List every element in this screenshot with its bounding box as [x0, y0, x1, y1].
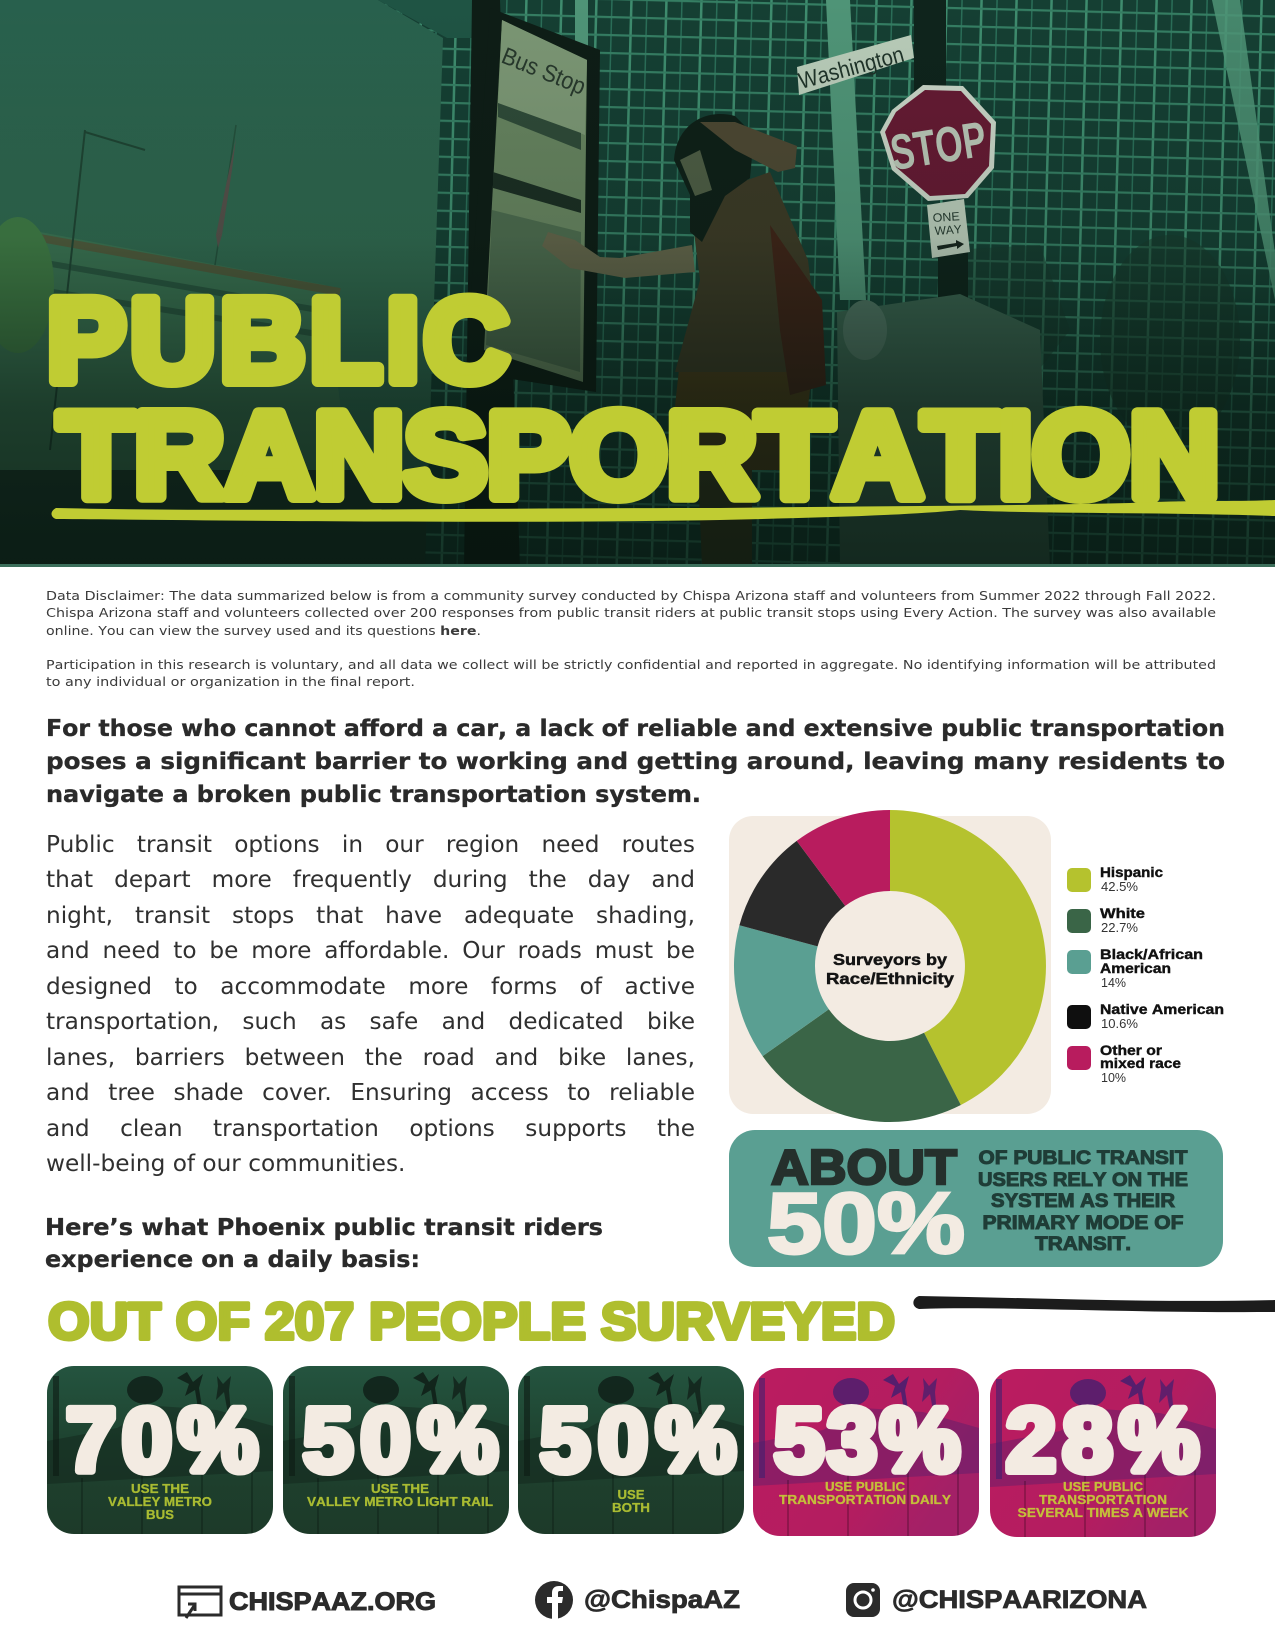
bold lead paragraph: For those who cannot afford a car, a lack of reliable and extensive public transportation — [46, 716, 1225, 742]
body paragraph: and tree shade cover. Ensuring access to reliable — [46, 1079, 695, 1106]
stat card: 28% use public transportation several times a week: USE PUBLIC — [1063, 1479, 1144, 1494]
donut wedge: Native American 10.6% — [739, 841, 845, 946]
data disclaimer text — [46, 588, 1216, 689]
icon: facebook — [535, 1581, 573, 1619]
legend swatch: Hispanic — [1067, 868, 1091, 892]
callout text: TRANSIT. — [1035, 1234, 1131, 1255]
stat card: 28% use public transportation several times a week: TRANSPORTATION — [1039, 1492, 1167, 1507]
icon: browser window — [179, 1587, 221, 1618]
photo detail: utility box — [837, 294, 1050, 567]
photo detail: one way sign: WAY — [934, 222, 962, 238]
footer: facebook — [535, 1581, 740, 1619]
legend labels: Native American — [1100, 1001, 1224, 1017]
legend labels: Other or — [1100, 1042, 1163, 1058]
stat card: 50% use both: USE — [618, 1487, 645, 1502]
donut wedge: Black/African American 14% — [734, 925, 829, 1056]
callout text: OF PUBLIC TRANSIT — [978, 1148, 1188, 1169]
stat card: 70% use the Valley Metro bus — [47, 1366, 273, 1534]
body paragraph: lanes, barriers between the road and bike lanes, — [46, 1044, 695, 1071]
dark gradient overlay — [0, 0, 1275, 565]
title: public transportation: PUBLIC — [47, 275, 509, 407]
footer: instagram: @CHISPAARIZONA — [892, 1586, 1147, 1614]
bold lead paragraph — [46, 716, 1225, 808]
data disclaimer text: online. You can view the survey used and its questions here . — [46, 623, 481, 638]
photo detail: Washington street sign: Washington — [796, 41, 907, 94]
legend labels: American — [1100, 960, 1171, 976]
stat card: 28% use public transportation several times a week: SEVERAL TIMES A WEEK — [1018, 1505, 1189, 1520]
hero photo: woman reading a bus stop sign — [0, 0, 1275, 567]
legend labels: 42.5% — [1101, 879, 1138, 894]
bold lead paragraph: poses a significant barrier to working and getting around, leaving many residents to — [46, 749, 1225, 775]
stat card: 50% use the Valley Metro light rail: 50% — [303, 1391, 498, 1491]
legend swatch: Black/African American — [1067, 950, 1091, 974]
footer: facebook: @ChispaAZ — [584, 1586, 740, 1614]
donut centre label — [826, 952, 954, 988]
donut wedge: Hispanic 42.5% — [890, 810, 1046, 1105]
body paragraph: transportation, such as safe and dedicated bike — [46, 1008, 695, 1035]
donut wedge: Other or mixed race 10% — [797, 810, 890, 906]
legend labels: 22.7% — [1101, 920, 1138, 935]
callout label: about: ABOUT — [771, 1141, 957, 1195]
callout text: USERS RELY ON THE — [978, 1170, 1188, 1191]
photo detail: distant building and tree — [0, 217, 460, 567]
body paragraph: that depart more frequently during the day and — [46, 866, 695, 893]
data disclaimer text: Chispa Arizona staff and volunteers collected over 200 responses from public transit riders at public transit stops using Every Action. The survey was also available — [46, 605, 1216, 620]
legend labels: mixed race — [1100, 1055, 1181, 1071]
photo detail: one way sign: ONE — [932, 209, 960, 225]
callout text — [978, 1148, 1188, 1255]
donut centre label: Race/Ethnicity — [826, 971, 954, 988]
photo detail: bus stop pole and information panel — [464, 0, 600, 567]
body paragraph: and need to be more affordable. Our roads must be — [46, 937, 695, 964]
callout: about 50% rely on transit — [729, 1130, 1223, 1272]
stat card: 70% use the Valley Metro bus: VALLEY METRO — [108, 1494, 212, 1509]
callout figure: 50%: 50% — [767, 1176, 965, 1272]
body paragraph: Public transit options in our region need routes — [46, 831, 695, 858]
donut centre label: Surveyors by — [833, 952, 947, 969]
stat card: 50% use the Valley Metro light rail: VALLEY METRO LIGHT RAIL — [307, 1494, 493, 1509]
legend labels: 10.6% — [1101, 1016, 1138, 1031]
photo detail: one way sign — [927, 199, 970, 258]
legend labels: 10% — [1101, 1070, 1126, 1085]
body paragraph: night, transit stops that have adequate shading, — [46, 902, 695, 929]
legend swatch: Other or mixed race — [1067, 1046, 1091, 1070]
stat card: 28% use public transportation several times a week: 28% — [1006, 1391, 1199, 1491]
stat card: 50% use the Valley Metro light rail: USE THE — [371, 1481, 429, 1496]
body paragraph — [46, 831, 695, 1177]
subheading: daily experience — [45, 1215, 603, 1273]
data disclaimer text: Data Disclaimer: The data summarized below is from a community survey conducted by Chispa Arizona staff and volunteers from Summer 2022 through Fall 2022. — [46, 588, 1216, 603]
body paragraph: and clean transportation options supports the — [46, 1114, 695, 1142]
stat card: 70% use the Valley Metro bus: 70% — [66, 1391, 258, 1491]
stat card: 53% use public transportation daily: USE PUBLIC — [825, 1479, 906, 1494]
legend labels: Black/African — [1100, 946, 1203, 962]
legend labels: Hispanic — [1100, 864, 1163, 880]
black brush stroke — [913, 1296, 1275, 1312]
subheading: daily experience: Here’s what Phoenix public transit riders — [45, 1215, 603, 1241]
stat card: 53% use public transportation daily: TRANSPORTATION DAILY — [779, 1492, 951, 1507]
body paragraph: well-being of our communities. — [46, 1150, 405, 1177]
chart legend — [1067, 864, 1224, 1085]
stat card: 28% use public transportation several times a week — [990, 1369, 1216, 1537]
body paragraph: designed to accommodate more forms of active — [46, 973, 695, 1000]
donut wedge: White 22.7% — [763, 1009, 961, 1122]
heading: out of 207 people surveyed: OUT OF 207 PEOPLE SURVEYED — [48, 1293, 895, 1351]
photo detail: woman figure — [542, 114, 826, 567]
title: public transportation — [47, 275, 1220, 524]
bold lead paragraph: navigate a broken public transportation system. — [46, 782, 701, 808]
photo detail: stop sign: STOP — [887, 111, 990, 181]
footer: instagram — [846, 1583, 1147, 1617]
legend swatch: Native American — [1067, 1005, 1091, 1029]
stat card: 50% use the Valley Metro light rail — [283, 1366, 509, 1534]
footer: website — [179, 1587, 436, 1618]
legend labels: 14% — [1101, 975, 1126, 990]
stat card: 70% use the Valley Metro bus: USE THE — [131, 1481, 189, 1496]
legend labels: White — [1100, 905, 1145, 921]
subheading: daily experience: experience on a daily basis: — [45, 1247, 420, 1273]
photo detail: stop sign — [880, 85, 996, 201]
callout text: PRIMARY MODE OF — [982, 1213, 1184, 1234]
photo detail: stop sign post — [914, 0, 946, 120]
footer: website: CHISPAAZ.ORG — [229, 1588, 436, 1616]
panel: donut chart of surveyors by race and ethnicity — [729, 810, 1051, 1122]
legend labels — [1100, 864, 1224, 1085]
photo detail: glass building facade — [378, 0, 1275, 567]
icon: instagram — [846, 1583, 880, 1617]
stat card: 50% use both: BOTH — [612, 1500, 650, 1515]
stat card: 50% use both — [518, 1366, 744, 1534]
data disclaimer text: to any individual or organization in the final report. — [46, 674, 415, 689]
title: public transportation: TRANSPORTATION — [58, 388, 1220, 524]
photo detail: street lamp and flag pole — [50, 125, 236, 450]
callout text: SYSTEM AS THEIR — [991, 1191, 1175, 1212]
stat card: 53% use public transportation daily — [753, 1368, 979, 1536]
title underline brush stroke — [52, 500, 1275, 522]
stat card: 50% use both: 50% — [540, 1391, 736, 1491]
stat card: 70% use the Valley Metro bus: BUS — [146, 1507, 174, 1522]
legend swatch: White — [1067, 909, 1091, 933]
stat card: 53% use public transportation daily: 53% — [774, 1391, 960, 1491]
data disclaimer text: Participation in this research is voluntary, and all data we collect will be strictly confidential and reported in aggregate. No identifying information will be attributed — [46, 657, 1216, 672]
photo detail: bus stop pole and information panel: Bus Stop — [498, 43, 589, 101]
